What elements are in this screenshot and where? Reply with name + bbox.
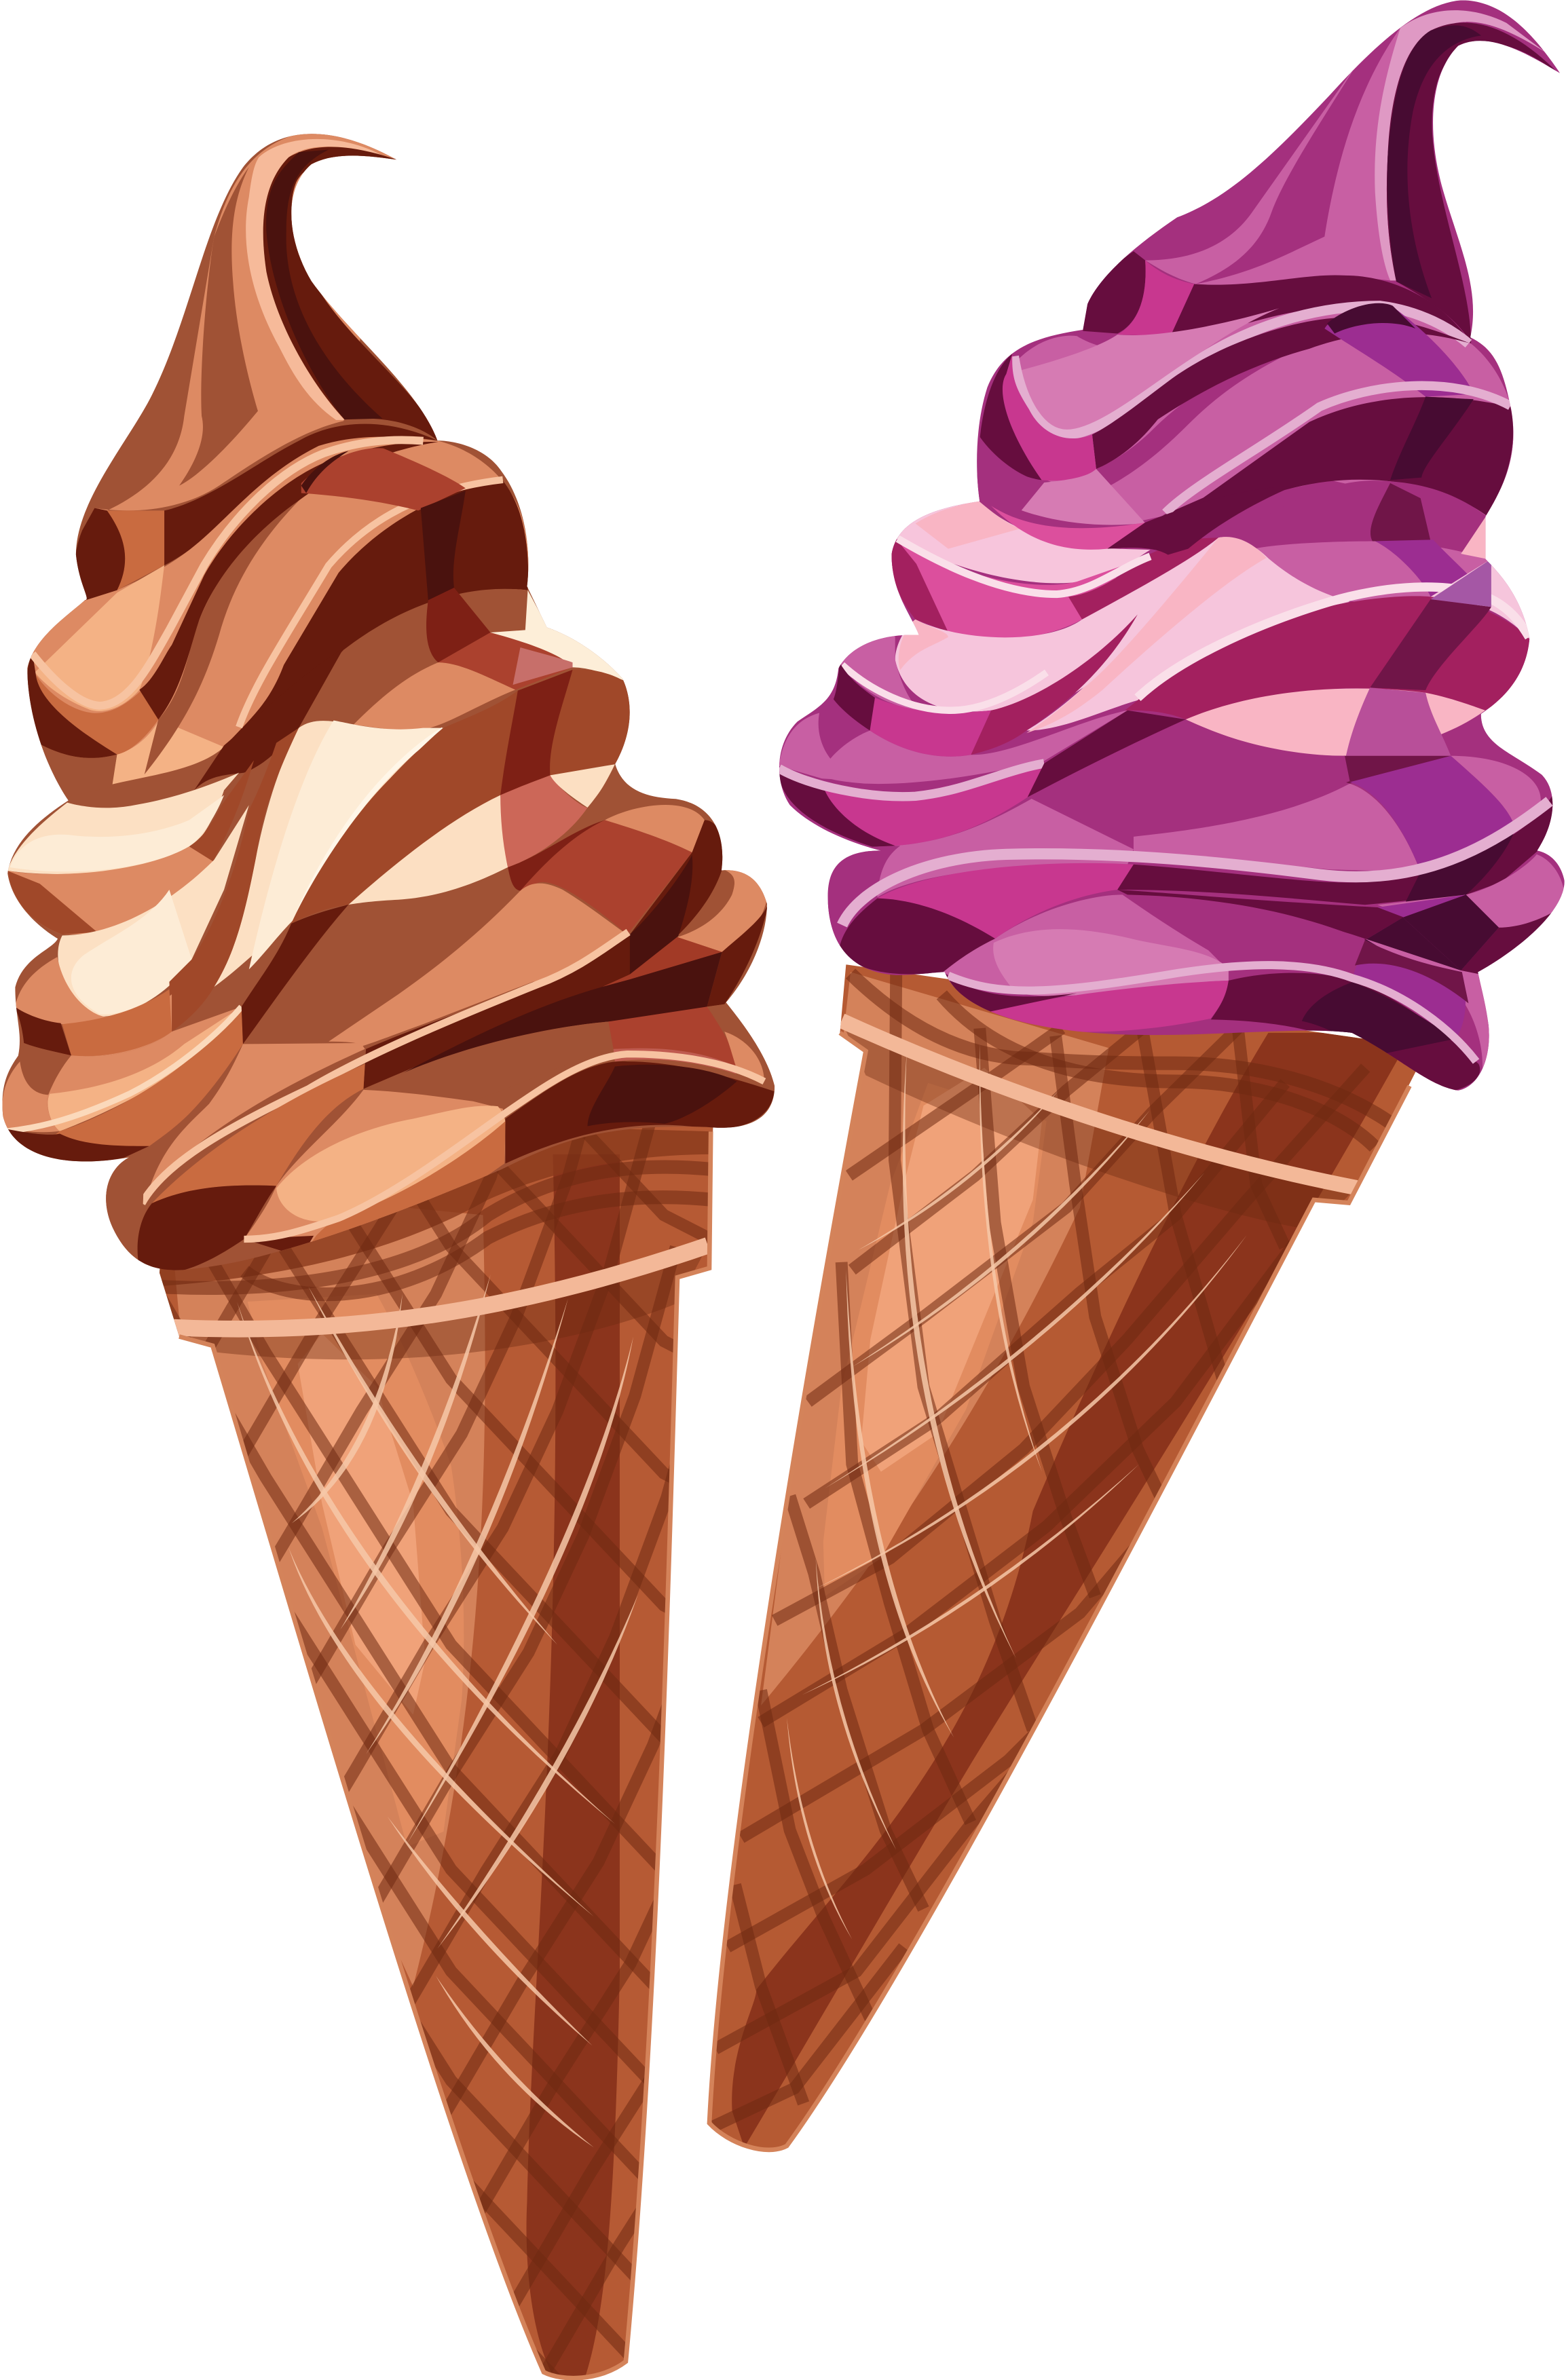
left cone highlight streaks: [237, 1274, 638, 2147]
right soft-serve swirl: [767, 0, 1566, 1109]
right collar band: [842, 1021, 1356, 1188]
right collar shadow: [842, 1021, 1356, 1230]
left swirl upper tiers: [27, 130, 625, 797]
right swirl tip and upper tier: [977, 10, 1559, 525]
right swirl lower tiers: [779, 480, 1565, 1092]
left collar shadow: [176, 1256, 702, 1360]
right cone edge: [709, 1033, 1410, 2150]
left collar band: [173, 1245, 708, 1329]
left cone waffle body: [160, 1127, 713, 2376]
right cone waffle body: [698, 957, 1443, 2157]
right cone: [698, 957, 1443, 2157]
left soft-serve swirl: [0, 121, 782, 1291]
left cone: [160, 1127, 713, 2380]
left swirl lower tiers: [2, 648, 775, 1273]
right cone highlight streaks: [787, 1044, 1247, 1940]
left cone edge: [179, 1131, 711, 2378]
